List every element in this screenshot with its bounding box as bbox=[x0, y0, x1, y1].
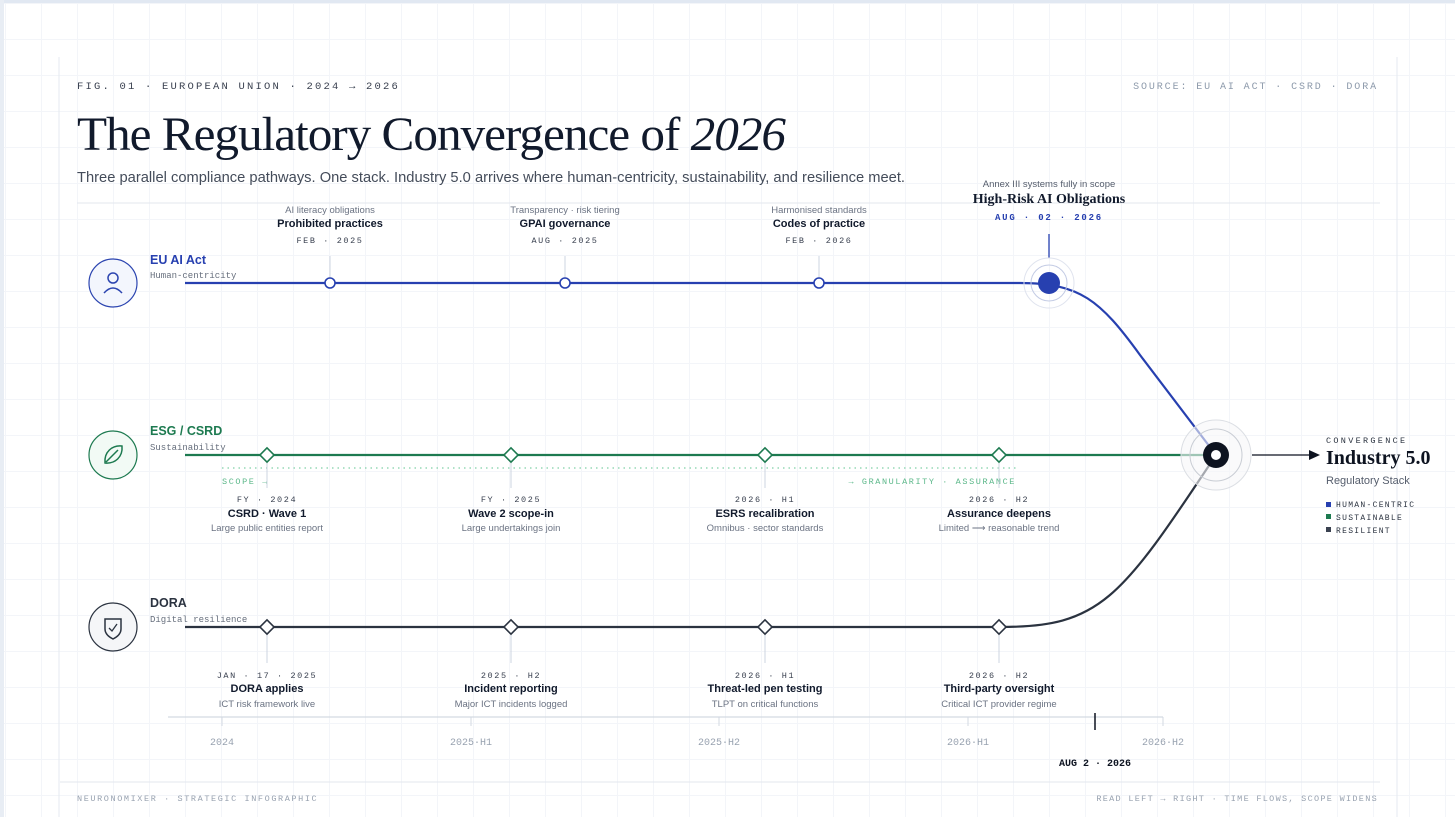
milestone: third-party oversight bbox=[941, 620, 1057, 710]
milestone: prohibited practices bbox=[277, 205, 383, 288]
source note: SOURCE: EU AI ACT · CSRD · DORA bbox=[1133, 82, 1378, 93]
milestone: DORA applies: DORA applies bbox=[231, 683, 303, 695]
milestone: incident reporting bbox=[455, 620, 567, 710]
time axis: 2026·H2 bbox=[1142, 738, 1184, 749]
icon: shield bbox=[89, 603, 137, 651]
milestone: third-party oversight: Critical ICT provider regime bbox=[941, 699, 1057, 710]
time axis bbox=[168, 713, 1184, 770]
milestone: wave 2 bbox=[462, 448, 560, 534]
milestone: CSRD wave 1: Large public entities report bbox=[211, 523, 323, 534]
milestone: wave 2: FY · 2025 bbox=[481, 495, 541, 505]
milestone: codes of practice: Harmonised standards bbox=[771, 205, 867, 216]
milestone: ESRS recalibration: 2026 · H1 bbox=[735, 495, 795, 505]
label: DORA bbox=[150, 596, 247, 625]
milestone: codes of practice: FEB · 2026 bbox=[785, 236, 853, 246]
legend: RESILIENT bbox=[1336, 527, 1391, 536]
scope band: → GRANULARITY · ASSURANCE bbox=[848, 477, 1016, 487]
milestone: prohibited practices: Prohibited practices bbox=[277, 218, 383, 230]
callout: Industry 5.0: Industry 5.0 bbox=[1326, 447, 1430, 469]
milestone: incident reporting: Major ICT incidents logged bbox=[455, 699, 567, 710]
milestone: high-risk AI obligations: Annex III systems fully in scope bbox=[983, 179, 1115, 190]
milestone: CSRD wave 1: FY · 2024 bbox=[237, 495, 297, 505]
label: DORA: DORA bbox=[150, 596, 187, 610]
callout: Industry 5.0 bbox=[1326, 436, 1430, 536]
milestone: codes of practice bbox=[771, 205, 867, 288]
label: EU AI Act: EU AI Act bbox=[150, 253, 207, 267]
label: DORA: Digital resilience bbox=[150, 615, 247, 625]
milestone: threat-led pen testing bbox=[708, 620, 822, 710]
milestone: GPAI governance: Transparency · risk tiering bbox=[510, 205, 620, 216]
milestone: threat-led pen testing: Threat-led pen testing bbox=[708, 683, 822, 695]
marker: Aug 2 2026: AUG 2 · 2026 bbox=[1059, 759, 1131, 770]
milestone: prohibited practices: FEB · 2025 bbox=[296, 236, 364, 246]
milestone: GPAI governance: GPAI governance bbox=[520, 218, 610, 230]
line: ESG path bbox=[185, 454, 1216, 456]
pathway: DORA bbox=[89, 455, 1216, 710]
time axis: 2025·H1 bbox=[450, 738, 492, 749]
pathway: EU AI Act bbox=[89, 179, 1216, 455]
title: The Regulatory Convergence of 2026 bbox=[77, 108, 786, 161]
milestone: prohibited practices: AI literacy obligations bbox=[285, 205, 375, 216]
milestone: CSRD wave 1: CSRD · Wave 1 bbox=[228, 508, 306, 520]
scope band: SCOPE → bbox=[222, 477, 269, 487]
milestone: threat-led pen testing: 2026 · H1 bbox=[735, 671, 795, 681]
label: EU AI Act: Human-centricity bbox=[150, 271, 237, 281]
time axis: 2024 bbox=[210, 738, 234, 749]
label: ESG / CSRD: ESG / CSRD bbox=[150, 424, 222, 438]
milestone: GPAI governance: AUG · 2025 bbox=[531, 236, 599, 246]
milestone: ESRS recalibration: Omnibus · sector standards bbox=[707, 523, 824, 534]
milestone: wave 2: Large undertakings join bbox=[462, 523, 560, 534]
milestone: assurance deepens: 2026 · H2 bbox=[969, 495, 1029, 505]
figure kicker: FIG. 01 · EUROPEAN UNION · 2024 → 2026 bbox=[77, 81, 400, 93]
milestone: DORA applies: JAN · 17 · 2025 bbox=[217, 671, 317, 681]
legend: HUMAN-CENTRIC bbox=[1336, 501, 1415, 510]
legend bbox=[1326, 501, 1415, 536]
time axis: 2026·H1 bbox=[947, 738, 989, 749]
milestone: third-party oversight: 2026 · H2 bbox=[969, 671, 1029, 681]
milestone: GPAI governance bbox=[510, 205, 620, 288]
milestone: high-risk AI obligations: High-Risk AI Obligations bbox=[973, 192, 1126, 207]
milestone: ESRS recalibration bbox=[707, 448, 824, 534]
milestone: assurance deepens bbox=[939, 448, 1059, 534]
label: EU AI Act bbox=[150, 253, 237, 281]
milestone: threat-led pen testing: TLPT on critical functions bbox=[712, 699, 818, 710]
milestone: high-risk AI obligations: AUG · 02 · 2026 bbox=[995, 213, 1103, 223]
milestone: incident reporting: Incident reporting bbox=[464, 683, 558, 695]
marker: Aug 2 2026 bbox=[1059, 713, 1131, 770]
subtitle: Three parallel compliance pathways. One stack. Industry 5.0 arrives where human-centricity, sustainability, and resilience meet. bbox=[77, 170, 905, 186]
milestone: assurance deepens: Assurance deepens bbox=[947, 508, 1051, 520]
line: DORA path bbox=[185, 455, 1216, 627]
legend: SUSTAINABLE bbox=[1336, 514, 1403, 523]
footer left: NEURONOMIXER · STRATEGIC INFOGRAPHIC bbox=[77, 794, 318, 804]
label: ESG / CSRD: Sustainability bbox=[150, 443, 226, 453]
milestone: wave 2: Wave 2 scope-in bbox=[468, 508, 554, 520]
callout: Industry 5.0: CONVERGENCE bbox=[1326, 436, 1407, 446]
milestone: ESRS recalibration: ESRS recalibration bbox=[715, 508, 815, 520]
milestone: CSRD wave 1 bbox=[211, 448, 323, 534]
arrow: to Industry 5.0 bbox=[1252, 450, 1320, 460]
icon: leaf bbox=[89, 431, 137, 479]
callout: Industry 5.0: Regulatory Stack bbox=[1326, 475, 1410, 487]
milestone: DORA applies: ICT risk framework live bbox=[219, 699, 315, 710]
label: ESG / CSRD bbox=[150, 424, 226, 453]
milestone: third-party oversight: Third-party oversight bbox=[944, 683, 1055, 695]
time axis: 2025·H2 bbox=[698, 738, 740, 749]
scope band bbox=[222, 468, 1016, 487]
milestone: assurance deepens: Limited ⟶ reasonable trend bbox=[939, 523, 1059, 534]
footer right: READ LEFT → RIGHT · TIME FLOWS, SCOPE WIDENS bbox=[1096, 794, 1378, 804]
milestone: incident reporting: 2025 · H2 bbox=[481, 671, 541, 681]
milestone: codes of practice: Codes of practice bbox=[773, 218, 865, 230]
pathway: ESG / CSRD bbox=[89, 424, 1216, 534]
milestone: high-risk AI obligations bbox=[973, 179, 1126, 308]
icon: person bbox=[89, 259, 137, 307]
convergence node bbox=[1181, 420, 1251, 490]
milestone: DORA applies bbox=[217, 620, 317, 710]
line: EU AI Act path bbox=[185, 283, 1216, 455]
